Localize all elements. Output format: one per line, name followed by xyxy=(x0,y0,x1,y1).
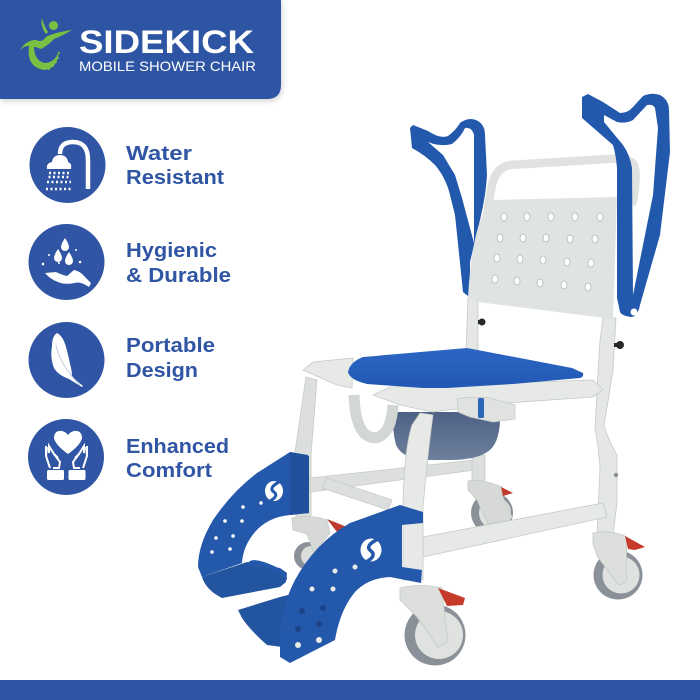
u-shaped tube xyxy=(354,395,393,438)
back frame tubes xyxy=(466,159,636,535)
logo icon xyxy=(20,18,72,70)
rear caster forks xyxy=(292,480,512,553)
rear left wheel xyxy=(294,542,322,570)
shower chair xyxy=(198,94,670,665)
icon: drops and hand xyxy=(42,238,91,287)
front frame xyxy=(403,413,607,580)
backrest panel xyxy=(468,197,617,319)
ventilation holes xyxy=(492,213,603,291)
icon: shower xyxy=(46,142,88,189)
feature: portable design xyxy=(28,322,215,398)
feature: hygienic and durable xyxy=(28,224,231,300)
adjustment knobs xyxy=(478,318,624,349)
bottom bar xyxy=(0,680,700,700)
seat cushion xyxy=(348,348,583,388)
rear frame tubes xyxy=(295,377,485,518)
right armrest xyxy=(582,94,670,317)
rear brakes xyxy=(327,487,513,532)
label: Enhanced xyxy=(126,435,229,458)
icon: feather xyxy=(51,333,83,387)
feature: water resistant: Resistant xyxy=(126,166,224,189)
left footrest xyxy=(198,452,309,598)
brand subtitle: MOBILE SHOWER CHAIR xyxy=(79,58,256,74)
toilet bucket xyxy=(393,412,500,460)
label: Hygienic xyxy=(126,239,217,262)
seat frame xyxy=(303,358,603,422)
feature: portable design: Design xyxy=(126,359,198,382)
right footrest xyxy=(238,505,423,663)
feature: enhanced comfort: Comfort xyxy=(126,459,212,482)
feature: water resistant xyxy=(30,127,224,203)
front left wheel xyxy=(400,586,466,666)
label: Water xyxy=(126,142,192,165)
icon: hands and heart xyxy=(46,431,87,480)
feature: hygienic and durable: & Durable xyxy=(126,264,231,287)
rear right wheel xyxy=(471,492,513,534)
label: Portable xyxy=(126,334,215,357)
front right wheel xyxy=(593,532,645,600)
header banner xyxy=(0,0,281,99)
blue clip xyxy=(478,398,484,418)
left armrest xyxy=(410,119,487,296)
feature: enhanced comfort xyxy=(28,419,229,495)
brand name: SIDEKICK xyxy=(79,24,254,60)
